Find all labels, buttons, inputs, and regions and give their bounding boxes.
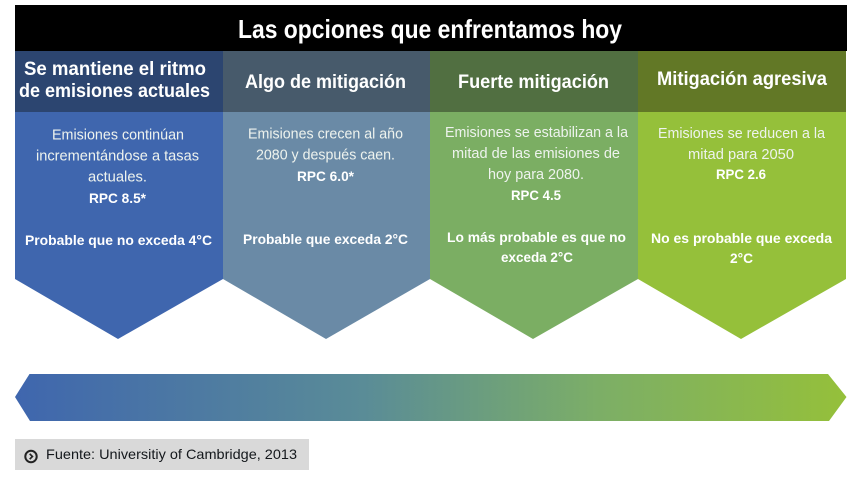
- panel heading: Algo de mitigación: [245, 72, 406, 93]
- description: mitad para 2050: [688, 147, 794, 163]
- outcome: No es probable que exceda: [651, 230, 832, 246]
- source note: [15, 439, 309, 470]
- panel: fuerte mitigacion: [430, 51, 638, 339]
- description: hoy para 2080.: [488, 167, 584, 183]
- description: Emisiones se estabilizan a la: [445, 125, 629, 141]
- panel heading: Se mantiene el ritmo: [24, 59, 206, 80]
- description: RPC 2.6: [716, 166, 766, 182]
- description: [445, 125, 629, 203]
- description: mitad de las emisiones de: [452, 146, 620, 162]
- outcome: [651, 230, 832, 266]
- description: incrementándose a tasas: [36, 148, 199, 164]
- panel body arrow: [15, 112, 223, 339]
- outcome: Probable que exceda 2°C: [243, 231, 408, 247]
- description: Emisiones continúan: [52, 128, 184, 144]
- outcome: Lo más probable es que no: [447, 229, 626, 245]
- description: RPC 6.0*: [297, 168, 355, 184]
- panel: algo de mitigacion: [223, 51, 430, 339]
- description: [658, 126, 826, 182]
- description: 2080 y después caen.: [256, 148, 395, 164]
- description: [36, 128, 199, 206]
- outcome: [447, 229, 626, 265]
- gradient double arrow: [15, 374, 846, 421]
- description: actuales.: [88, 170, 147, 186]
- source text: Fuente: Universitiy of Cambridge, 2013: [46, 446, 297, 462]
- title: [15, 5, 847, 51]
- panel heading: Mitigación agresiva: [657, 69, 827, 90]
- panel heading: [430, 51, 638, 112]
- panel heading: [15, 51, 223, 112]
- description: [248, 126, 403, 184]
- panel heading: Fuerte mitigación: [458, 72, 609, 93]
- title: Las opciones que enfrentamos hoy: [238, 14, 622, 44]
- panel body arrow: [638, 112, 846, 339]
- outcome: exceda 2°C: [501, 249, 573, 265]
- panel: mitigacion agresiva: [638, 51, 846, 339]
- description: Emisiones se reducen a la: [658, 126, 826, 142]
- outcome: Probable que no exceda 4°C: [25, 232, 212, 248]
- description: RPC 4.5: [511, 187, 561, 203]
- outcome: 2°C: [730, 250, 753, 266]
- description: Emisiones crecen al año: [248, 126, 403, 142]
- description: RPC 8.5*: [89, 190, 147, 206]
- icon: circled chevron: [25, 451, 37, 462]
- panel heading: [638, 51, 846, 112]
- panel: se mantiene el ritmo: [15, 51, 223, 339]
- panel heading: de emisiones actuales: [19, 81, 210, 102]
- panel heading: [223, 51, 430, 112]
- panel body arrow: [430, 112, 638, 339]
- panel body arrow: [223, 112, 430, 339]
